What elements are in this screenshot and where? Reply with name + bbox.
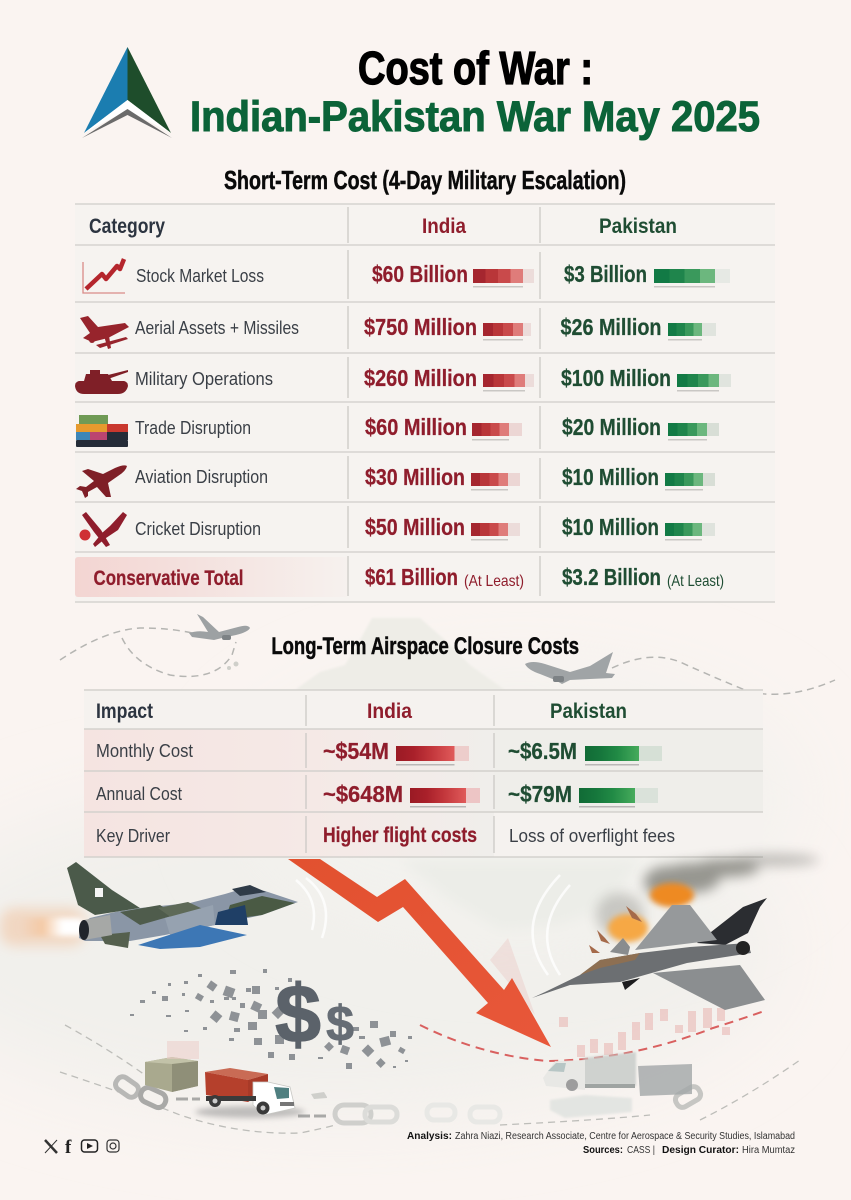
row: trade disruption: Trade Disruption xyxy=(135,418,251,438)
row: monthly cost xyxy=(96,738,662,766)
credits xyxy=(407,1131,795,1156)
row: annual cost xyxy=(96,781,658,808)
exhaust flame xyxy=(0,908,85,946)
row: military operations: Military Operations xyxy=(135,369,273,389)
radar rings xyxy=(296,875,570,975)
row: conservative total: Conservative Total xyxy=(94,567,244,590)
row: military operations xyxy=(75,365,731,394)
dollar signs and debris: $ xyxy=(275,969,321,1060)
panel: short-term table xyxy=(75,204,775,602)
icon: youtube xyxy=(82,1140,98,1152)
icon: rising line chart xyxy=(83,259,125,293)
heading: short-term: Short-Term Cost (4-Day Military Escalation) xyxy=(224,165,626,195)
row: annual cost: ~$648M xyxy=(323,781,403,807)
row: military operations: $260 Million xyxy=(364,365,477,391)
icon: stacked containers xyxy=(76,415,128,447)
arrow: falling cost xyxy=(288,859,551,1047)
table header: Pakistan xyxy=(599,215,677,238)
row: annual cost: ~$79M xyxy=(508,781,572,807)
row: monthly cost: ~$54M xyxy=(323,738,389,764)
flight paths xyxy=(60,628,835,694)
pale chart bars xyxy=(490,938,730,1057)
faded truck and container xyxy=(543,1052,692,1118)
table header xyxy=(96,700,627,723)
row: aerial assets + missiles: $750 Million xyxy=(364,314,477,340)
icon: crossed bats and ball xyxy=(80,512,127,547)
row: cricket disruption xyxy=(80,512,715,547)
row: conservative total: $3.2 Billion xyxy=(562,564,661,590)
row: trade disruption xyxy=(76,414,719,447)
row: trade disruption: $20 Million xyxy=(562,414,661,440)
logo xyxy=(82,47,172,138)
jet: Pakistani fighter xyxy=(0,862,298,949)
row: aerial assets + missiles: Aerial Assets + Missiles xyxy=(135,318,299,338)
credits: CASS | xyxy=(627,1145,655,1156)
credits: Design Curator: xyxy=(662,1145,739,1156)
row: key driver: Higher flight costs xyxy=(323,824,477,847)
credits: Analysis: xyxy=(407,1131,452,1142)
row: stock market loss: $3 Billion xyxy=(564,261,647,287)
title: Indian-Pakistan War May 2025 xyxy=(190,93,760,141)
row: stock market loss: Stock Market Loss xyxy=(136,266,264,286)
jet: Rafale xyxy=(532,898,767,1010)
table header xyxy=(89,215,677,238)
truck xyxy=(195,1068,305,1118)
table header: Impact xyxy=(96,700,153,723)
title xyxy=(190,42,760,141)
row: aviation disruption: Aviation Disruption xyxy=(135,467,268,487)
row: key driver: Loss of overflight fees xyxy=(509,826,675,846)
icon: instagram xyxy=(107,1140,119,1152)
row: cricket disruption: $10 Million xyxy=(562,514,659,540)
row: military operations: $100 Million xyxy=(561,365,671,391)
smoke and fire xyxy=(589,854,819,953)
fuselage xyxy=(79,888,298,941)
row: aviation disruption: $10 Million xyxy=(562,464,659,490)
dollar signs and debris xyxy=(130,969,412,1069)
icon: X xyxy=(45,1140,57,1153)
row: aerial assets + missiles xyxy=(80,314,716,349)
row: annual cost: Annual Cost xyxy=(96,784,182,804)
table header: Category xyxy=(89,215,165,238)
table header: India xyxy=(367,700,412,723)
table header: India xyxy=(422,215,466,238)
row: aviation disruption xyxy=(76,464,715,498)
icon: airplane xyxy=(76,465,127,498)
dashed routes bottom xyxy=(60,1025,800,1133)
dollar signs and debris: $ xyxy=(326,996,354,1052)
row: cricket disruption: Cricket Disruption xyxy=(135,519,261,539)
credits: Hira Mumtaz xyxy=(742,1145,795,1156)
heading: long-term: Long-Term Airspace Closure Costs xyxy=(271,633,579,660)
row: aviation disruption: $30 Million xyxy=(365,464,465,490)
icon: plane right xyxy=(525,652,615,684)
credits: Sources: xyxy=(583,1145,623,1156)
row: conservative total: (At Least) xyxy=(667,573,724,590)
row: conservative total xyxy=(94,564,724,590)
icon: facebook: f xyxy=(65,1137,72,1158)
social icons xyxy=(45,1137,119,1158)
dashed decline curve xyxy=(420,1010,767,1061)
icon: jet and missile xyxy=(80,316,129,349)
row: cricket disruption: $50 Million xyxy=(365,514,465,540)
table header: Pakistan xyxy=(550,700,627,723)
olive container xyxy=(145,1041,199,1092)
icon: plane left xyxy=(189,614,250,670)
row: stock market loss xyxy=(83,259,730,293)
row: conservative total: (At Least) xyxy=(464,573,524,590)
row: aerial assets + missiles: $26 Million xyxy=(560,314,662,340)
small box xyxy=(311,1092,327,1099)
row: conservative total: $61 Billion xyxy=(365,564,458,590)
panel: long-term table xyxy=(84,690,763,857)
row: monthly cost: ~$6.5M xyxy=(508,738,577,764)
row: monthly cost: Monthly Cost xyxy=(96,741,193,761)
row: trade disruption: $60 Million xyxy=(365,414,467,440)
row: key driver xyxy=(96,824,675,847)
icon: tank xyxy=(75,370,128,394)
credits: Zahra Niazi, Research Associate, Centre for Aerospace & Security Studies, Islamabad xyxy=(455,1131,795,1142)
row: stock market loss: $60 Billion xyxy=(372,261,468,287)
title: Cost of War : xyxy=(358,42,593,94)
chains xyxy=(113,1074,703,1123)
row: key driver: Key Driver xyxy=(96,826,170,846)
